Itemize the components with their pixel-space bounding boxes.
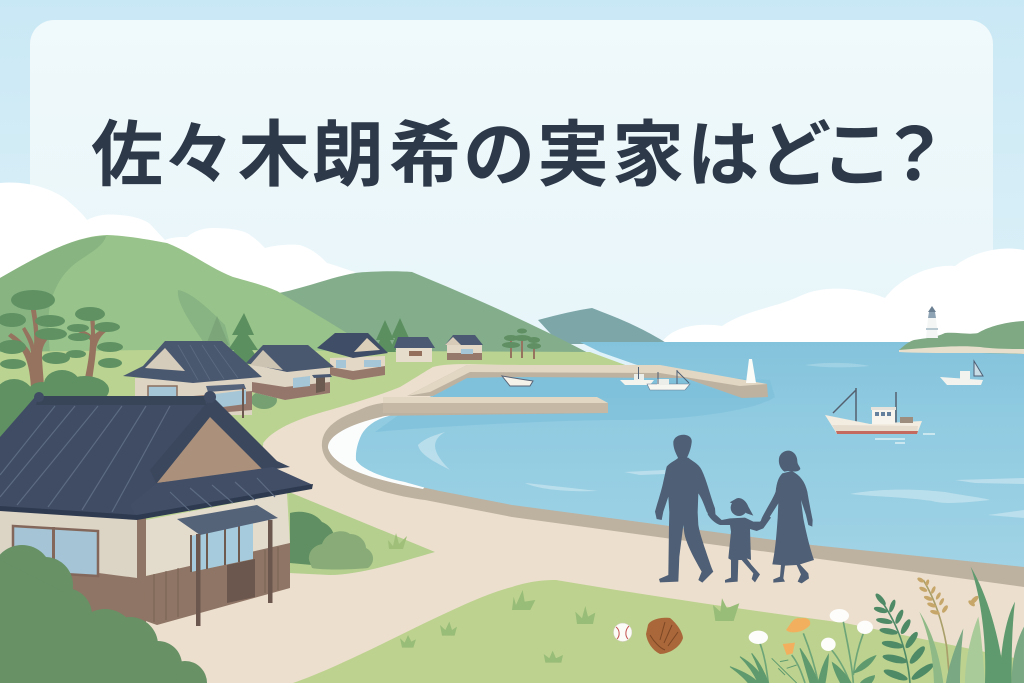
child <box>708 498 771 583</box>
siding lines <box>154 547 278 622</box>
house 3 <box>246 345 334 400</box>
harbour boat 2 <box>647 370 690 390</box>
sea <box>356 342 1024 567</box>
road base <box>0 480 460 683</box>
far mountain <box>538 308 668 344</box>
family silhouette <box>655 435 814 583</box>
tall grass <box>919 567 1024 683</box>
foreground plants <box>730 567 1024 683</box>
main house <box>0 391 313 626</box>
harbour basin <box>433 376 742 398</box>
sky background <box>0 0 1024 400</box>
eave shade <box>0 484 313 520</box>
ridge caps <box>34 391 216 403</box>
village ground <box>0 350 628 580</box>
left wall <box>0 510 137 625</box>
house 5 <box>394 337 435 362</box>
lower field <box>293 580 1024 683</box>
gable slope <box>150 397 290 485</box>
grass tuft near road <box>388 533 407 549</box>
door <box>227 559 255 603</box>
porch windows <box>191 523 253 572</box>
title: 佐々木朗希の実家はどこ？ <box>91 116 950 196</box>
pine tree left <box>0 290 70 390</box>
middle mountain <box>260 271 594 356</box>
clouds left <box>0 182 355 330</box>
flower stems <box>760 622 863 683</box>
water highlights <box>418 363 1024 518</box>
right wall base <box>143 543 290 625</box>
bushes behind main house <box>0 370 109 440</box>
ridge <box>36 396 206 405</box>
baseball glove <box>646 618 683 654</box>
white flowers <box>749 609 873 651</box>
harbour boat 1 <box>620 367 654 385</box>
window divider <box>52 527 55 573</box>
upper breakwater <box>407 365 768 398</box>
right wall <box>146 493 290 576</box>
left wall base <box>0 560 137 622</box>
darker harbour water <box>375 370 775 432</box>
fishing boat <box>825 388 935 443</box>
road <box>157 364 1024 683</box>
house 6 <box>445 335 483 360</box>
house 2 <box>123 341 262 418</box>
title panel <box>30 20 993 350</box>
bush beside road dark <box>290 512 334 565</box>
island <box>899 321 1024 354</box>
left window <box>13 526 98 576</box>
centre post <box>137 515 146 625</box>
distant lighthouse <box>926 306 938 338</box>
main roof <box>0 397 230 517</box>
porch posts <box>196 520 272 626</box>
mother <box>760 451 814 583</box>
fern <box>873 592 936 683</box>
pine tree right <box>66 307 123 382</box>
lower roof <box>130 467 313 517</box>
conifers <box>206 313 411 364</box>
grass patch beside road <box>289 492 435 575</box>
grass tufts <box>400 590 739 663</box>
harbour lighthouse <box>746 359 756 383</box>
distant boat right <box>940 361 983 385</box>
shore pines <box>502 328 541 359</box>
gable <box>157 417 263 483</box>
clouds right <box>662 249 1024 345</box>
lower breakwater <box>350 397 608 416</box>
orange flowers <box>783 618 810 655</box>
near mountain <box>0 235 372 354</box>
house 4 <box>317 333 388 380</box>
boat on basin left <box>502 376 533 386</box>
flower leaves <box>730 648 828 683</box>
wheat <box>916 576 980 683</box>
bush beside road light <box>309 531 373 570</box>
father <box>655 435 716 583</box>
foreground bush <box>0 545 207 683</box>
window bars <box>191 524 239 572</box>
sea wall <box>322 402 1024 587</box>
roof seams <box>0 406 275 512</box>
small bush by house 2 <box>251 391 277 409</box>
foam on shore <box>328 414 440 489</box>
porch roof <box>177 505 278 535</box>
baseball <box>614 623 632 642</box>
island beach <box>899 346 1024 354</box>
